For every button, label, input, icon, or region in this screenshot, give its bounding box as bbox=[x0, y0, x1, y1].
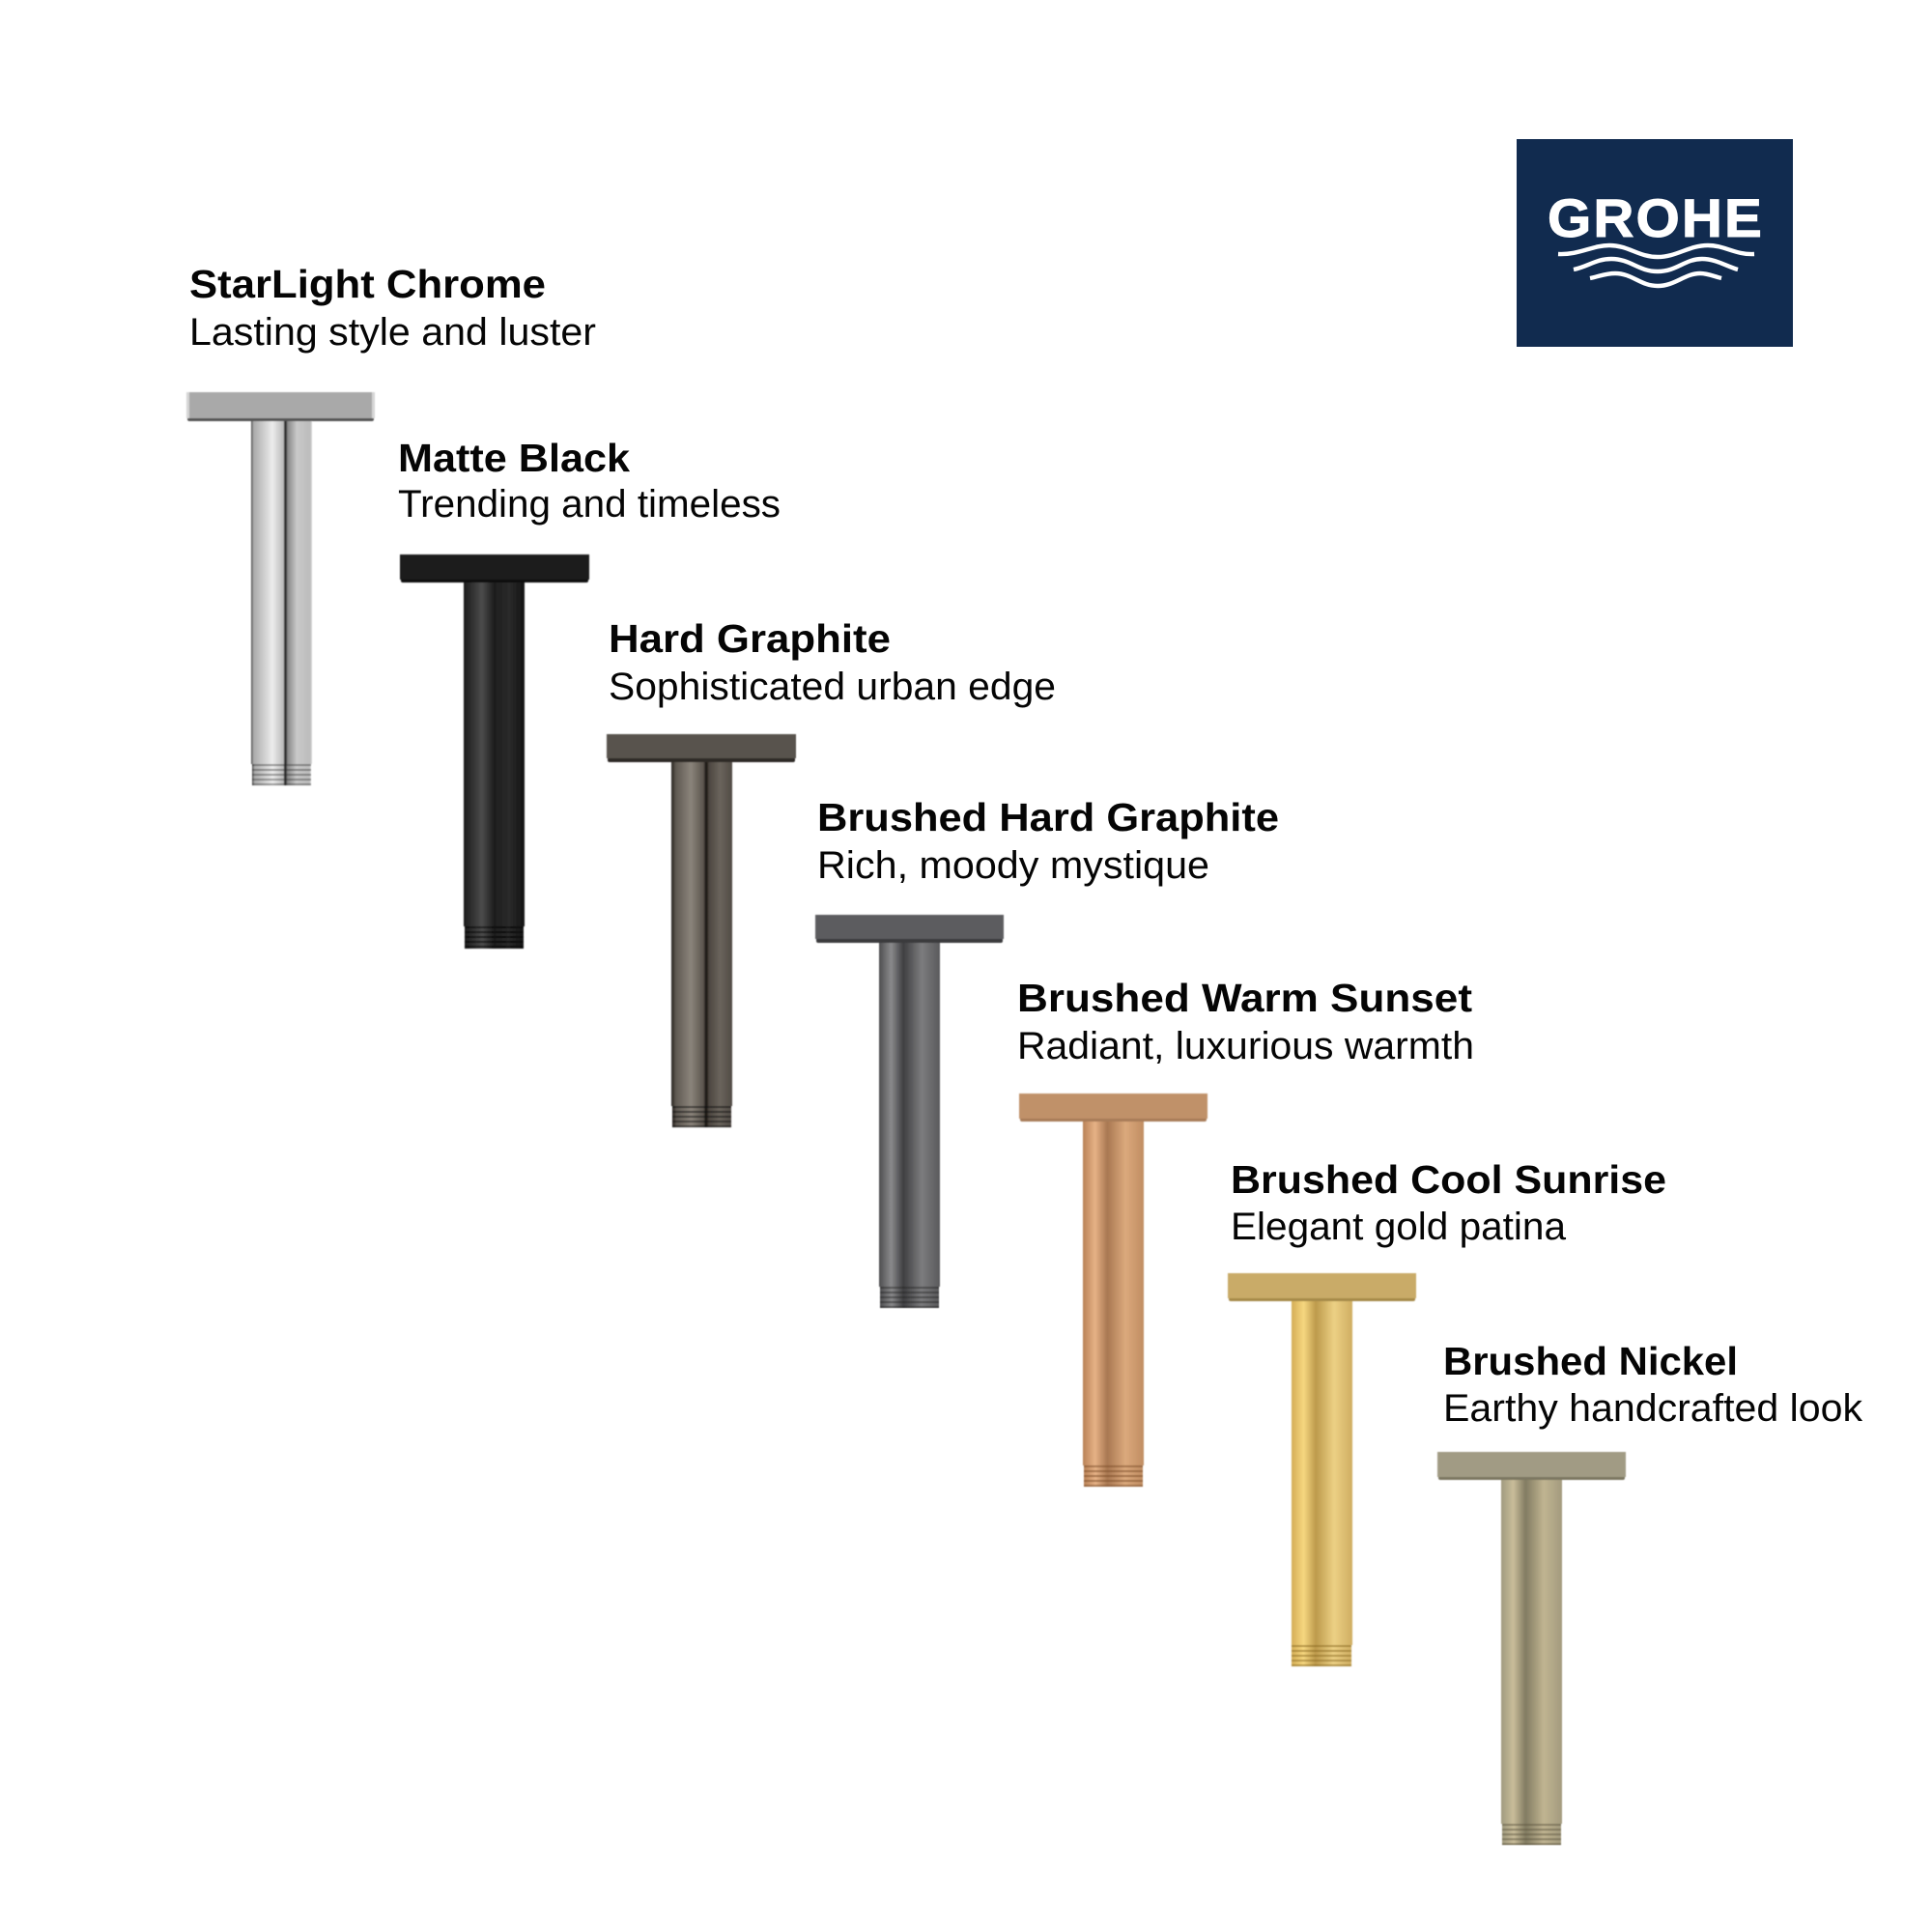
logo wordmark: GROHE bbox=[1548, 188, 1764, 249]
shower arm: hard graphite bbox=[607, 734, 796, 1127]
panel: StarLight Chrome bbox=[186, 262, 596, 785]
panel: Brushed Hard Graphite bbox=[815, 795, 1279, 1308]
shower arm: brushed nickel bbox=[1437, 1452, 1626, 1845]
description: Trending and timeless bbox=[398, 483, 781, 526]
description: Rich, moody mystique bbox=[817, 844, 1209, 887]
description: Earthy handcrafted look bbox=[1443, 1387, 1863, 1430]
panel: Brushed Nickel bbox=[1437, 1339, 1863, 1845]
panel: Matte Black bbox=[398, 436, 781, 949]
heading: Brushed Warm Sunset bbox=[1017, 976, 1472, 1020]
description: Radiant, luxurious warmth bbox=[1017, 1025, 1474, 1067]
logo waves bbox=[1558, 245, 1754, 286]
heading: StarLight Chrome bbox=[189, 262, 546, 306]
heading: Matte Black bbox=[398, 436, 630, 480]
shower arm: brushed warm sunset bbox=[1019, 1094, 1208, 1487]
logo: GROHE bbox=[1517, 139, 1793, 347]
heading: Brushed Cool Sunrise bbox=[1231, 1157, 1666, 1202]
panel: Brushed Warm Sunset bbox=[1017, 976, 1474, 1487]
shower arm: brushed hard graphite bbox=[815, 915, 1004, 1308]
description: Sophisticated urban edge bbox=[609, 666, 1056, 708]
shower arm: chrome bbox=[186, 392, 375, 785]
description: Lasting style and luster bbox=[189, 311, 596, 354]
heading: Brushed Nickel bbox=[1443, 1339, 1738, 1383]
panel: Brushed Cool Sunrise bbox=[1228, 1157, 1666, 1666]
shower arm: matte black bbox=[400, 554, 589, 949]
shower arm: brushed cool sunrise bbox=[1228, 1273, 1416, 1666]
panel: Hard Graphite bbox=[607, 616, 1056, 1127]
heading: Hard Graphite bbox=[609, 616, 891, 661]
heading: Brushed Hard Graphite bbox=[817, 795, 1279, 839]
description: Elegant gold patina bbox=[1231, 1206, 1567, 1248]
